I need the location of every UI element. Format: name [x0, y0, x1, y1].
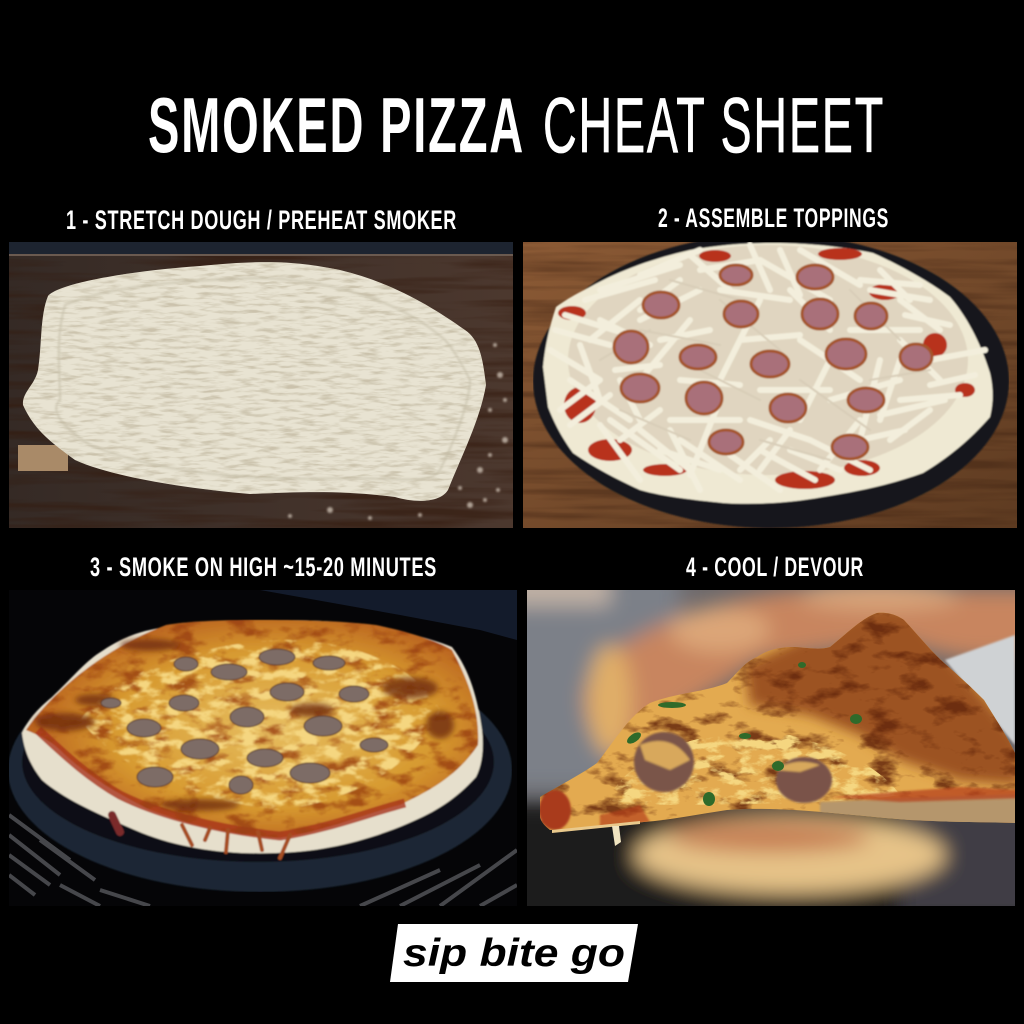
- heading: step 1: 1 - STRETCH DOUGH / PREHEAT SMOKER: [66, 205, 457, 235]
- dark char patches: [35, 639, 454, 811]
- heading: step 4: 4 - COOL / DEVOUR: [686, 552, 864, 582]
- dough: [23, 262, 486, 501]
- red sauce rim: [38, 730, 405, 836]
- herbs: [625, 662, 862, 806]
- sausage slices: [614, 265, 932, 459]
- logo: sip bite go: [390, 924, 638, 982]
- mottled browning: [26, 620, 478, 838]
- cheese shreds: [550, 245, 985, 490]
- crust underside: [819, 795, 1015, 823]
- grill grates: [9, 815, 517, 906]
- dough crust: [543, 243, 993, 504]
- panel: pizza slice close-up photo: [527, 590, 1015, 906]
- sausage slices: [101, 649, 388, 794]
- sauce patches: [558, 248, 975, 489]
- pan: [9, 709, 512, 892]
- pizza in pan: [8, 620, 512, 892]
- panel: stretched dough photo: [9, 242, 513, 528]
- panel: assembled raw pizza photo: [523, 234, 1017, 528]
- blurred pizza behind: [580, 590, 1015, 734]
- title: SMOKED PIZZA: [148, 81, 525, 169]
- heading: step 3: 3 - SMOKE ON HIGH ~15-20 MINUTES: [90, 552, 437, 582]
- cheese base: [568, 245, 968, 475]
- logo: sip bite go: sip bite go: [403, 932, 625, 975]
- slice tip sauce: [539, 790, 571, 830]
- cheese drips over crust: [112, 815, 290, 858]
- slice browned top: [745, 605, 1020, 785]
- baked cheese: [26, 620, 478, 838]
- sausage slices on slice: [634, 732, 832, 803]
- mottled light cheese: [80, 640, 440, 810]
- crust: [22, 620, 483, 853]
- spatula: [945, 635, 1015, 745]
- pan: [533, 234, 1009, 528]
- slice: [535, 605, 1020, 835]
- heading: step 2: 2 - ASSEMBLE TOPPINGS: [658, 203, 889, 233]
- panel: smoked pizza on grill photo: [8, 590, 517, 906]
- pizza in pan: [533, 234, 1009, 528]
